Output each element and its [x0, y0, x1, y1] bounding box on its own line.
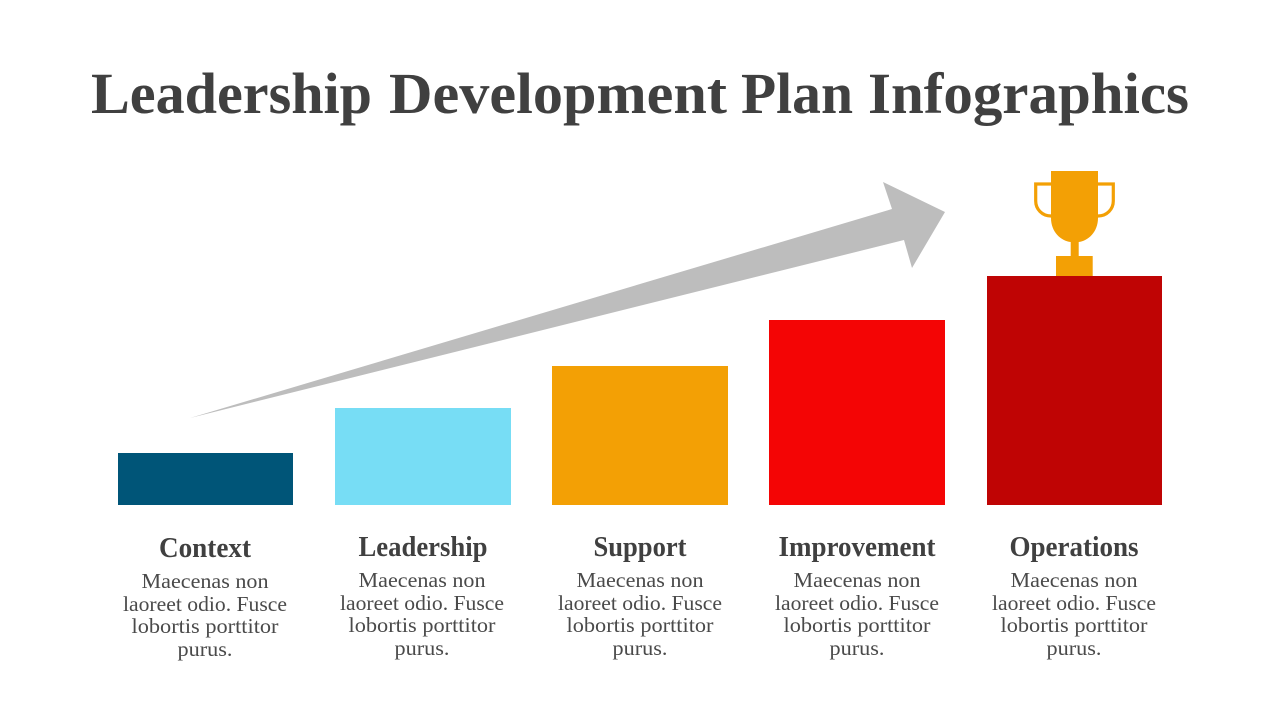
title: Development [389, 61, 728, 126]
text block: support [558, 532, 722, 660]
text block: support: lobortis porttitor [566, 613, 714, 637]
text block: operations: purus. [1046, 636, 1102, 660]
text block: operations: lobortis porttitor [1000, 613, 1148, 637]
text block: operations: Operations [1010, 532, 1139, 563]
text block: improvement: lobortis porttitor [784, 613, 930, 637]
bar: operations [987, 276, 1162, 505]
text block: context: purus. [178, 637, 232, 661]
title: Infographics [868, 61, 1189, 126]
text block: operations: Maecenas non [1010, 568, 1138, 592]
text block: support: Support [594, 532, 687, 563]
text block: improvement: purus. [830, 636, 884, 660]
text block: context: lobortis porttitor [132, 614, 278, 638]
text block: improvement [775, 532, 939, 660]
text block: context: Maecenas non [142, 569, 269, 593]
text block: leadership: Leadership [358, 532, 488, 563]
title [91, 61, 1189, 126]
bar: improvement [769, 320, 945, 505]
text block: leadership: Maecenas non [358, 568, 486, 592]
arrow: rising growth [190, 182, 945, 418]
text block: support: laoreet odio. Fusce [558, 591, 722, 615]
text block: context: Context [159, 533, 252, 564]
text block: leadership: laoreet odio. Fusce [340, 591, 504, 615]
bar: leadership [335, 408, 511, 505]
text block: support: Maecenas non [576, 568, 704, 592]
text block: improvement: Improvement [778, 532, 936, 563]
text block: improvement: laoreet odio. Fusce [775, 591, 939, 615]
text block: support: purus. [612, 636, 668, 660]
title: Plan [741, 61, 853, 126]
text block: operations: laoreet odio. Fusce [992, 591, 1156, 615]
icon: trophy [1036, 171, 1113, 276]
text block: operations [992, 532, 1156, 660]
title: Leadership [91, 61, 372, 126]
text block: context: laoreet odio. Fusce [123, 592, 287, 616]
bar: context [118, 453, 293, 505]
text block: improvement: Maecenas non [794, 568, 921, 592]
text block: context [123, 533, 287, 661]
bar: support [552, 366, 728, 505]
text block: leadership: lobortis porttitor [348, 613, 496, 637]
text block: leadership [340, 532, 504, 660]
text block: leadership: purus. [394, 636, 450, 660]
